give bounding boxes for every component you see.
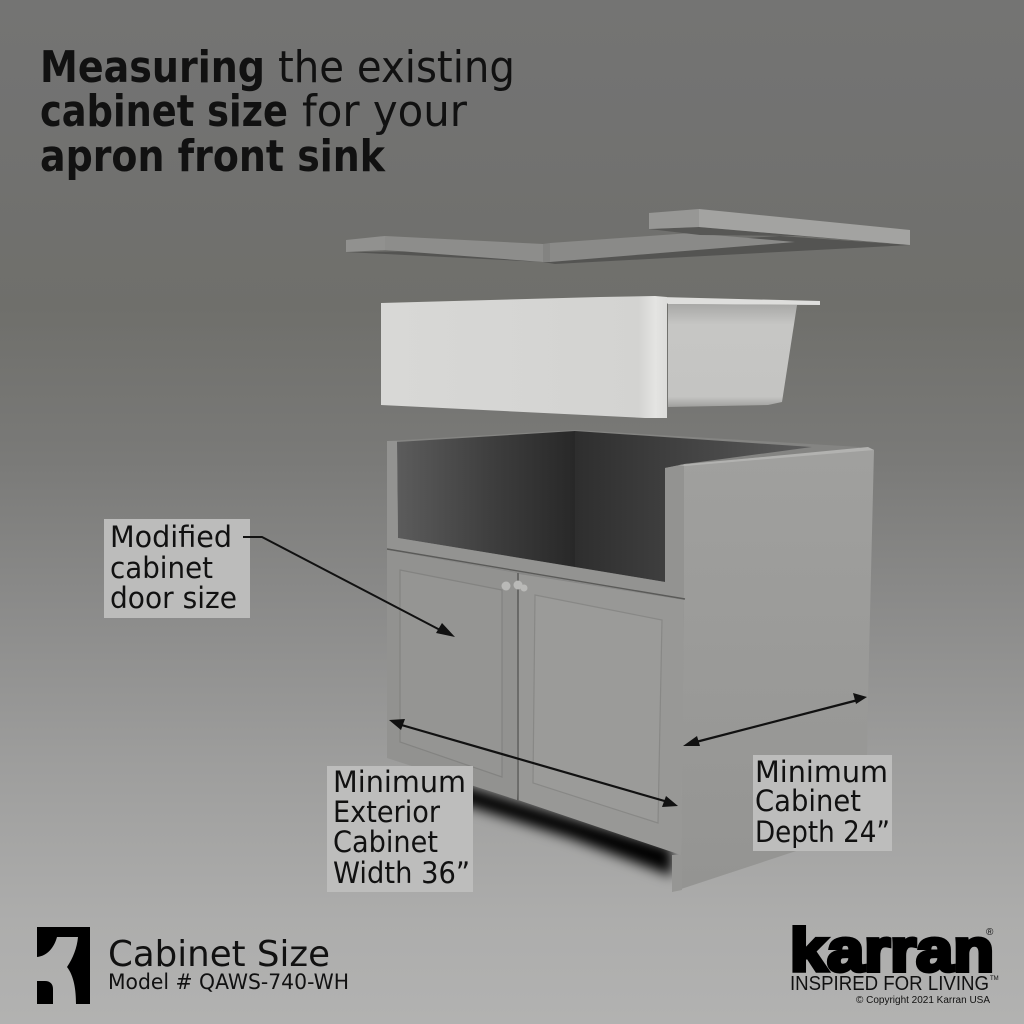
title: apron front sink — [40, 131, 386, 182]
callout: minimum cabinet depth: Minimum — [755, 755, 888, 789]
cabinet interior — [387, 430, 860, 600]
title: for your — [302, 86, 468, 137]
countertop pieces — [346, 209, 910, 264]
panel top edge — [679, 447, 874, 466]
callout: minimum exterior cabinet width: Minimum — [333, 765, 466, 799]
logo: Karran: © Copyright 2021 Karran USA — [856, 995, 990, 1006]
title: Measuring — [40, 42, 265, 93]
callout: minimum exterior cabinet width: Exterior — [333, 795, 440, 829]
heading: cabinet size and model — [108, 934, 349, 994]
callout: modified cabinet door size: cabinet — [110, 551, 213, 585]
callout: modified cabinet door size: door size — [110, 581, 237, 615]
door gap and top gap — [387, 549, 685, 800]
callout: minimum exterior cabinet width: Width 36” — [333, 856, 470, 890]
logo: Karran: INSPIRED FOR LIVING — [790, 973, 989, 995]
cabinet — [387, 430, 874, 892]
arrow: door size — [243, 537, 455, 637]
callout: modified cabinet door size: Modified — [110, 520, 232, 554]
side panel — [672, 448, 874, 892]
title — [40, 42, 515, 182]
callout: minimum exterior cabinet width — [327, 765, 473, 892]
logo: Karran: TM — [990, 976, 999, 982]
arrow: cabinet depth — [683, 693, 867, 746]
base leg — [672, 855, 682, 892]
callout: modified cabinet door size — [104, 519, 250, 618]
logo: Karran: ® — [986, 927, 994, 938]
heading: cabinet size and model: Model # QAWS-740-WH — [108, 970, 349, 994]
heading: cabinet size and model: Cabinet Size — [108, 934, 330, 975]
logo: Karran — [790, 917, 999, 1006]
callout: minimum cabinet depth — [753, 755, 892, 851]
title: the existing — [278, 42, 515, 93]
right door — [518, 574, 684, 855]
left door — [387, 550, 517, 800]
logo: Karran: karran — [790, 917, 994, 984]
callout: minimum cabinet depth: Depth 24” — [755, 815, 890, 849]
callout: minimum exterior cabinet width: Cabinet — [333, 825, 438, 859]
apron front sink — [381, 296, 820, 418]
arrow: cabinet width — [389, 719, 678, 807]
callout: minimum cabinet depth: Cabinet — [755, 784, 861, 818]
icon: Karran K mark — [37, 927, 90, 1004]
front frame — [387, 441, 685, 600]
shadow under doors — [440, 778, 672, 876]
door knobs — [502, 580, 528, 592]
title: cabinet size — [40, 86, 288, 137]
